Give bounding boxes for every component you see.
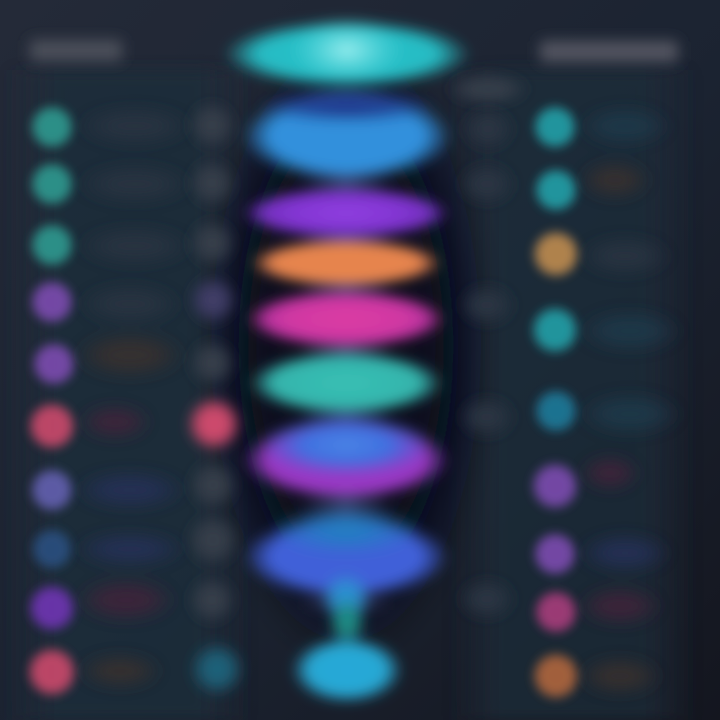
marker [188,219,236,267]
label [77,106,193,146]
funnel layer 6: teal band [248,351,444,415]
label [76,578,176,622]
marker [188,339,236,387]
right icons [528,102,583,703]
marker [459,285,515,325]
marker: teal [189,641,245,697]
icon dot [25,399,79,453]
label [578,309,682,353]
right small markers [459,109,515,619]
icon dot [530,529,580,579]
marker [188,576,236,624]
icon dot [28,525,76,573]
label [77,164,193,204]
dark funnel shadow [201,25,491,665]
right column small heading [446,73,530,105]
right heading [540,41,678,62]
marker [459,579,515,619]
icon dot [25,581,79,635]
marker [186,513,240,567]
label [77,226,193,266]
label [78,284,182,324]
label [579,236,671,276]
icon dot [530,102,580,152]
funnel layer 5: magenta band [246,290,446,348]
label [579,160,651,200]
marker [459,397,515,437]
marker [462,109,514,149]
icon dot [27,102,77,152]
right label bars [578,106,682,696]
left icons [24,102,80,700]
funnel layer 9: cyan base [291,636,403,704]
marker [188,159,236,207]
icon dot [27,159,77,209]
icon dot [531,165,581,215]
funnel layer 1: teal diamond [223,16,471,88]
icon dot [531,386,581,436]
label [580,455,640,491]
left column backing panel [5,70,250,720]
icon dot [27,277,77,327]
label [74,331,186,379]
funnel layer 4: orange band [250,239,442,287]
label [579,533,671,573]
funnel center glow [300,90,392,610]
marker [188,460,238,510]
funnel layer 3: purple band [242,187,450,239]
icon dot [529,649,583,703]
marker [188,275,238,325]
icon dot [528,303,582,357]
label [578,392,682,436]
icon dot [29,339,79,389]
icon dot [531,587,581,637]
label [578,586,662,626]
icon dot [24,644,80,700]
marker [459,164,515,204]
marker: pink [186,396,242,452]
left small markers [186,101,245,697]
funnel layer 8: blue diamond [242,504,450,624]
marker [188,101,236,149]
funnel stack [223,16,471,704]
label [578,656,662,696]
funnel stem [327,596,367,648]
left label bars [74,106,193,689]
icon dot [528,459,582,513]
label [74,470,186,510]
label [78,653,162,689]
label [579,106,671,146]
funnel layer 7: blue purple bowl [242,413,450,500]
funnel layer 2: blue bowl [241,88,453,182]
label [79,404,151,440]
icon dot [529,227,583,281]
icon dot [27,465,77,515]
icon dot [27,220,77,270]
left heading [30,40,122,61]
label [74,531,186,567]
right column backing panel [450,70,695,720]
